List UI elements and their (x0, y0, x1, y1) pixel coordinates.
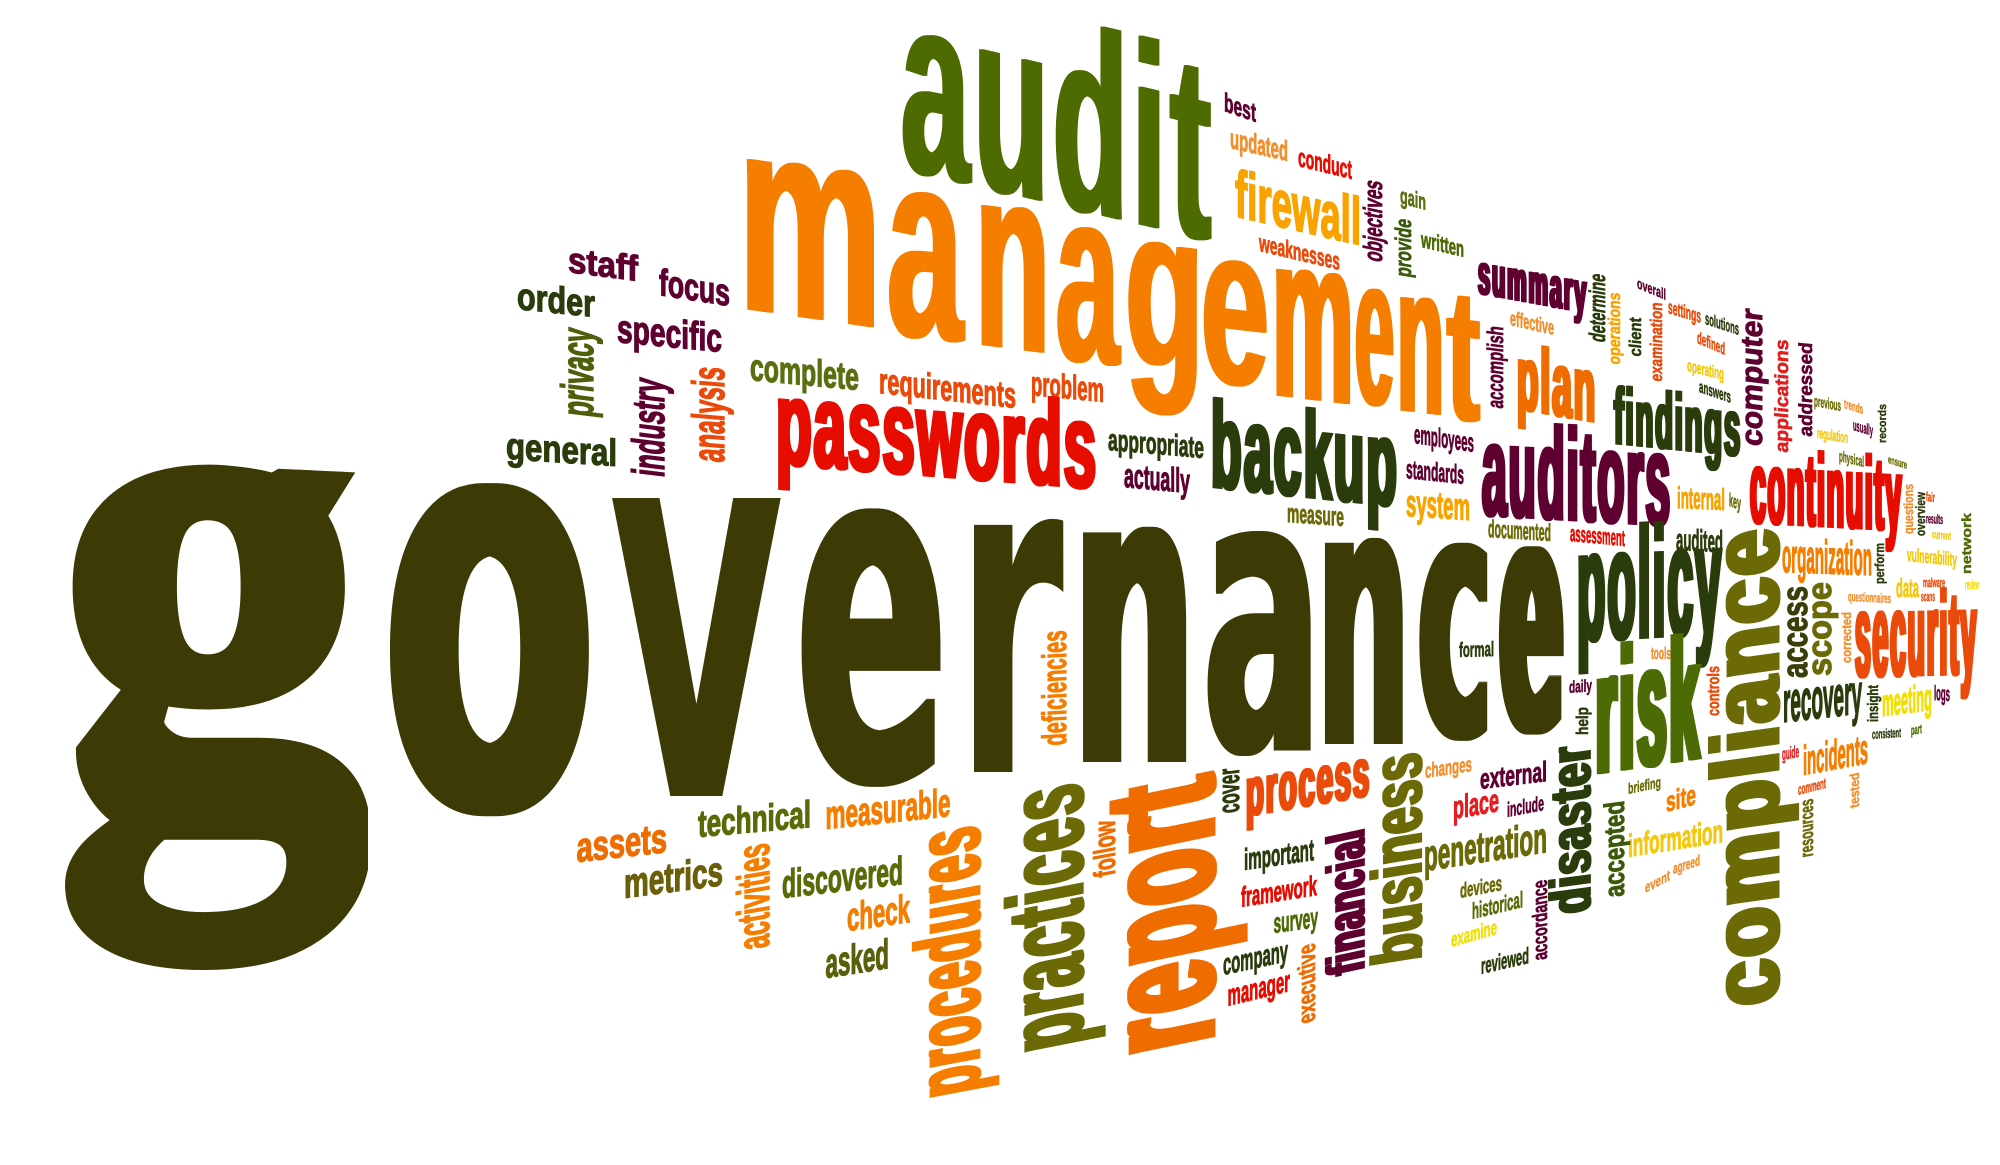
word: governance (58, 182, 1562, 966)
word: scope: scope (1802, 582, 1840, 676)
word: formal: formal (1459, 638, 1494, 663)
word: survey: survey (1274, 903, 1318, 940)
word: place: place (1453, 784, 1499, 828)
word: consistent: consistent (1872, 726, 1901, 742)
word: help: help (1574, 707, 1593, 735)
word: fair: fair (1926, 490, 1935, 506)
word: ensure: ensure (1888, 453, 1907, 472)
word: usually: usually (1853, 417, 1873, 440)
word: summary: summary (1478, 245, 1588, 328)
word: financial: financial (1319, 824, 1378, 980)
word: cover: cover (1213, 765, 1247, 815)
word: event: event (1645, 867, 1670, 897)
word: disaster: disaster (1542, 741, 1605, 917)
word: staff: staff (568, 242, 639, 291)
word: accordance: accordance (1529, 878, 1553, 962)
word: defined: defined (1697, 329, 1725, 360)
word: applications: applications (1772, 338, 1793, 454)
word: governance: o (383, 269, 596, 947)
word: system: system (1406, 484, 1470, 530)
word: gain: gain (1400, 184, 1426, 216)
word: technical: technical (698, 795, 811, 847)
word: regulation: regulation (1817, 425, 1848, 447)
word: objectives: objectives (1360, 177, 1389, 265)
word: written: written (1420, 228, 1464, 263)
word: metrics: metrics (624, 850, 723, 909)
word: results: results (1926, 512, 1943, 528)
word: asked: asked (826, 933, 889, 989)
word: operating: operating (1687, 357, 1724, 385)
word: employees: employees (1414, 421, 1474, 459)
word: procedures: procedures (902, 817, 1003, 1104)
word: order: order (517, 277, 596, 327)
word: executive: executive (1294, 940, 1321, 1027)
word: effective: effective (1510, 307, 1554, 340)
word: updated: updated (1230, 124, 1288, 168)
word: site: site (1666, 780, 1696, 820)
word: assessment: assessment (1570, 522, 1625, 552)
word: auditors: auditors (1482, 405, 1672, 559)
word: key: key (1729, 490, 1741, 515)
word: accomplish: accomplish (1484, 325, 1509, 410)
word: guide: guide (1782, 743, 1799, 765)
word: management: a (1056, 133, 1120, 421)
word: accepted: accepted (1600, 799, 1632, 899)
word: framework: framework (1241, 871, 1317, 914)
word: previous: previous (1814, 393, 1841, 415)
word: governance: v (608, 289, 785, 927)
word: tools: tools (1651, 645, 1671, 664)
word: provide: provide (1392, 217, 1417, 279)
word: malware: malware (1923, 576, 1945, 590)
word: tested: tested (1848, 771, 1862, 809)
word: trends: trends (1844, 397, 1863, 418)
word: information: information (1628, 815, 1723, 866)
word: follow: follow (1089, 817, 1123, 880)
word: overview: overview (1914, 492, 1928, 536)
word: network: network (1960, 513, 1974, 574)
word: policy: policy (1577, 501, 1723, 681)
word: weaknesses: weaknesses (1258, 230, 1340, 277)
word: historical: historical (1472, 888, 1523, 925)
word: report: report (1082, 760, 1254, 1067)
word: answers: answers (1699, 378, 1731, 408)
word: risk: risk (1596, 612, 1702, 817)
word: insight: insight (1865, 685, 1882, 722)
word: solutions: solutions (1705, 310, 1739, 340)
word: reviewed: reviewed (1481, 944, 1529, 980)
word: problem: problem (1031, 366, 1104, 411)
word: focus: focus (659, 263, 730, 316)
word: measure: measure (1287, 500, 1344, 533)
word: current: current (1932, 528, 1951, 543)
word: governance: g (58, 182, 368, 966)
word: management: t (1447, 247, 1480, 464)
word: security: security (1855, 574, 1978, 707)
word: examination: examination (1648, 301, 1667, 383)
word: meeting: meeting (1882, 678, 1932, 726)
word: appropriate: appropriate (1108, 424, 1204, 466)
word: specific: specific (617, 308, 722, 362)
word: governance: c (1418, 415, 1492, 819)
word: passwords: passwords (776, 362, 1098, 520)
word: questionnaires: questionnaires (1848, 590, 1891, 607)
word: governance: e (1501, 425, 1562, 809)
word: briefing: briefing (1628, 774, 1661, 798)
word: controls: controls (1705, 666, 1724, 716)
word: include: include (1507, 792, 1544, 823)
word: external: external (1480, 757, 1547, 796)
word: findings: findings (1614, 376, 1742, 477)
word: changes: changes (1425, 753, 1472, 784)
word: governance: n (1317, 402, 1410, 832)
word: determine: determine (1586, 272, 1611, 344)
word: corrected: corrected (1840, 612, 1854, 663)
word: firewall: firewall (1235, 160, 1361, 263)
word: perform: perform (1873, 543, 1887, 584)
word: management: a (887, 90, 965, 402)
word: agreed: agreed (1673, 852, 1700, 878)
word: complete: complete (750, 348, 859, 400)
word: assets: assets (576, 817, 667, 873)
word: actually: actually (1124, 458, 1190, 502)
word: management: m (738, 52, 882, 391)
word: business: business (1362, 747, 1440, 969)
word: scans: scans (1921, 590, 1935, 604)
word: records: records (1876, 404, 1889, 443)
word: compliance: compliance (1698, 520, 1803, 1012)
word: activities: activities (731, 840, 781, 953)
word: logs: logs (1934, 682, 1950, 707)
word: best: best (1224, 89, 1257, 129)
word: management: g (1125, 155, 1204, 422)
word: addressed: addressed (1796, 341, 1817, 438)
word: questions: questions (1902, 484, 1916, 534)
word: manager: manager (1228, 965, 1291, 1014)
word: vulnerability: vulnerability (1907, 545, 1957, 571)
word: internal: internal (1677, 482, 1725, 518)
word: client: client (1627, 316, 1646, 358)
word: management (738, 52, 1480, 464)
word: penetration: penetration (1424, 815, 1547, 882)
word: governance: e (796, 329, 947, 896)
word: industry: industry (626, 375, 676, 480)
word: check: check (847, 888, 911, 941)
word: practices: practices (992, 773, 1110, 1061)
word: management: m (1272, 179, 1354, 458)
word: comment: comment (1798, 775, 1826, 799)
word: standards: standards (1406, 456, 1464, 491)
word: physical: physical (1839, 448, 1864, 471)
word: management: e (1355, 208, 1394, 454)
word: important: important (1244, 834, 1315, 878)
word: governance: a (1203, 386, 1321, 845)
word: deficiencies: deficiencies (1037, 630, 1075, 747)
word: governance: r (956, 352, 1066, 880)
word: recovery: recovery (1783, 665, 1862, 737)
word: management: n (975, 105, 1050, 412)
word: resources: resources (1797, 797, 1818, 859)
word: process: process (1246, 737, 1371, 834)
word: backup: backup (1211, 384, 1399, 538)
word: management: e (1201, 173, 1269, 439)
word: general: general (506, 427, 617, 476)
word: incidents: incidents (1803, 728, 1868, 786)
word: company: company (1223, 935, 1288, 983)
word: management: n (1397, 216, 1444, 463)
word: privacy: privacy (555, 325, 605, 420)
word: data: data (1896, 575, 1919, 604)
word: access: access (1777, 586, 1817, 678)
word: review: review (1965, 578, 1979, 592)
word: measurable: measurable (826, 782, 950, 839)
word: analysis: analysis (686, 365, 736, 464)
word: documented: documented (1488, 516, 1551, 548)
word: devices: devices (1460, 872, 1502, 904)
word: requirements: requirements (879, 363, 1016, 418)
word: overall: overall (1637, 275, 1666, 304)
word: governance: n (1072, 371, 1196, 863)
word: continuity: continuity (1750, 436, 1903, 557)
word: computer: computer (1736, 306, 1770, 448)
word: settings: settings (1668, 297, 1701, 328)
word: audited: audited (1676, 524, 1723, 560)
word: operations: operations (1606, 291, 1625, 366)
word: plan: plan (1517, 331, 1597, 446)
word: part: part (1911, 722, 1922, 738)
word: daily: daily (1569, 677, 1592, 698)
word: organization: organization (1782, 532, 1872, 588)
word: conduct: conduct (1298, 144, 1353, 186)
word: examine: examine (1451, 916, 1497, 953)
word: discovered: discovered (782, 850, 903, 908)
